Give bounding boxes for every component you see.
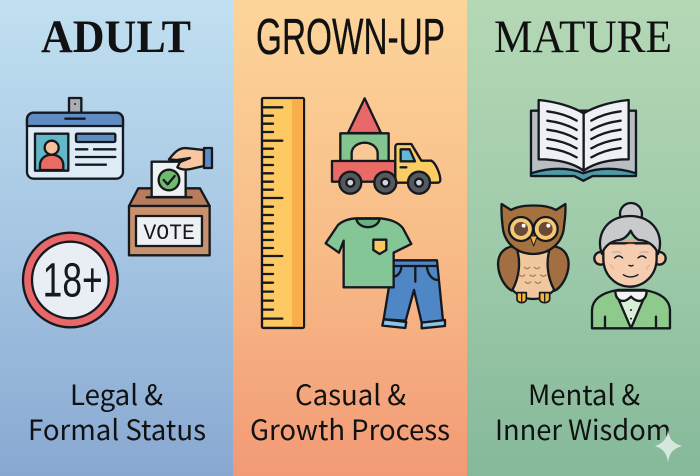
icon: t-shirt bbox=[326, 218, 411, 287]
icon: ruler bbox=[262, 98, 304, 328]
icon: smiling grandmother bbox=[592, 203, 670, 328]
caption: grown-up: Growth Process bbox=[250, 409, 450, 449]
caption: adult: Formal Status bbox=[28, 409, 206, 449]
icon: id card bbox=[27, 98, 123, 179]
icon: 18 plus badge bbox=[23, 233, 118, 327]
icon: ballot box: VOTE bbox=[143, 221, 195, 246]
icon: owl bbox=[498, 204, 569, 303]
icon: ballot box bbox=[129, 148, 212, 255]
caption: grown-up: Casual & bbox=[295, 374, 406, 414]
heading: grown-up: GROWN-UP bbox=[256, 8, 445, 65]
panel: adult bbox=[0, 0, 233, 476]
heading: mature: MATURE bbox=[494, 11, 672, 63]
heading: adult: ADULT bbox=[41, 11, 191, 63]
icon: toy truck with blocks bbox=[332, 98, 440, 194]
caption: mature: Inner Wisdom bbox=[495, 409, 671, 449]
icon: 18 plus badge: 18+ bbox=[43, 254, 103, 308]
icon: sparkle watermark bbox=[655, 430, 682, 463]
caption: adult bbox=[28, 374, 206, 449]
caption: grown-up bbox=[250, 374, 450, 449]
icon: jeans bbox=[382, 260, 445, 328]
caption: adult: Legal & bbox=[70, 374, 163, 414]
panel: mature bbox=[467, 0, 700, 476]
caption: mature bbox=[495, 374, 671, 449]
caption: mature: Mental & bbox=[528, 374, 640, 414]
panel: grown-up bbox=[233, 0, 467, 476]
icon: open book bbox=[531, 100, 636, 181]
